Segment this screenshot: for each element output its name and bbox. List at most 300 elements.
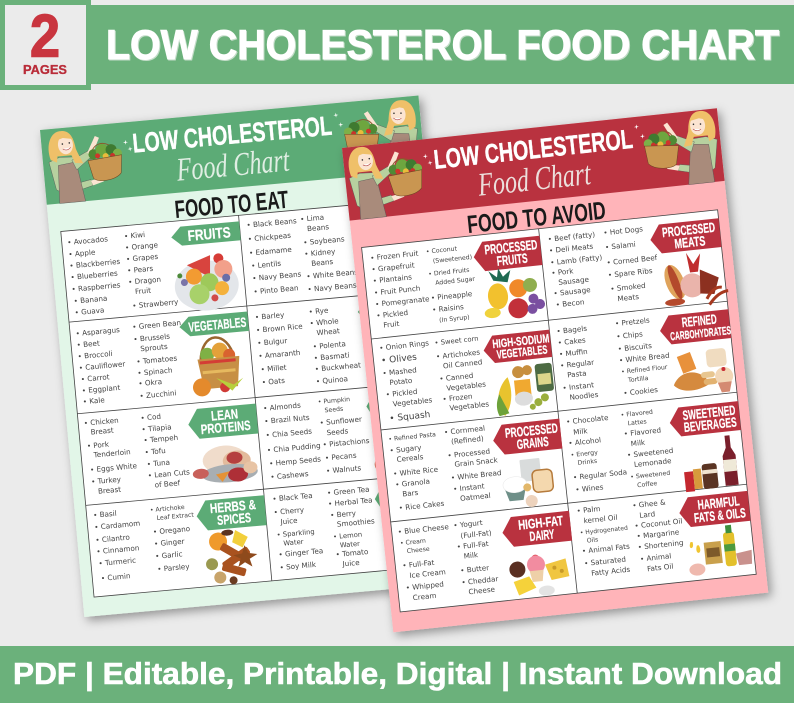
list: sweetened beverages: • Energy [570,449,599,459]
banner: lean proteins [187,404,258,440]
list: vegetables: • Tomatoes [136,354,178,366]
list: harmful fats and oils: Lard [639,509,656,520]
icon: mixed fruit [480,264,546,322]
list: processed meats: • Lamb (Fatty) [550,253,603,267]
list: sweetened beverages: • Sweetened [630,470,671,481]
icon: dairy foods [508,551,571,599]
list: high-sodium vegetables: • Canned [439,371,474,383]
list: lean proteins: • Eggs White [90,461,138,474]
banner: lean proteins: LEAN [210,406,239,424]
list: refined carbohydrates: • Pretzels [615,316,650,328]
table grid [61,198,461,597]
list: refined carbohydrates: • Instant [562,380,595,393]
list: processed fruits: • Dried Fruits [428,267,470,278]
icon: grains and bread [500,457,555,510]
list: high-fat dairy: • Full-Fat [456,539,489,551]
footer banner [0,646,794,703]
list: high-fat dairy: Cheese [407,546,430,555]
panel: nuts and seeds [263,395,373,482]
banner: processed meats [649,218,722,254]
list: legumes: Beans [307,222,330,233]
list: refined carbohydrates: • Biscuits [617,341,653,354]
panel: fruits [67,221,247,323]
list: high-sodium vegetables [379,333,490,425]
list: herbs and spices: • Artichoke [150,504,185,514]
list: harmful fats and oils: • Animal [640,551,672,564]
list: vegetables: • Kale [82,395,106,406]
list: processed meats: • Salami [604,240,636,252]
list: vegetables: • Spinach [137,366,173,378]
badge: 2 pages [0,0,91,90]
list: herbs and spices: • Turmeric [98,556,136,568]
banner: processed fruits: FRUITS [496,251,528,269]
list: processed meats: • Hot Dogs [603,224,644,237]
list: legumes: • Kidney [304,247,336,259]
list: harmful fats and oils: Oils [586,536,599,545]
sheet header: red [342,108,725,221]
list: sweetened beverages: • Chocolate [566,413,609,426]
list: legumes: Beans [311,257,334,268]
list: fruits: • Strawberry [132,297,179,310]
banner: processed grains: GRAINS [516,434,549,452]
list: lean proteins: • Tempeh [143,433,178,445]
list: fruits: • Raspberries [71,280,121,294]
list: lean proteins: • Turkey [91,475,122,486]
banner: refined carbohydrates: REFINED [681,311,718,330]
icon: meats and fish [191,443,259,486]
list: vegetables: • Broccoli [77,349,113,361]
list: high-fat dairy: • Cheddar [461,574,499,587]
list: sweetened beverages: Milk [630,438,646,448]
list: refined carbohydrates: • Cakes [557,335,586,347]
list: high-sodium vegetables: • Artichokes [436,347,481,361]
panel: processed grains [388,416,568,521]
list: processed grains: • Instant [453,481,485,494]
list: processed fruits: • Fruit Punch [373,284,421,297]
list: herbs and spices: Leaf Extract [156,512,195,522]
list: grains: • Polenta [312,339,346,351]
icon: spices [203,527,260,587]
panel: food to avoid sheet [342,108,768,632]
badge: 2 pages: PAGES [23,63,67,77]
sheet header: red: Food Chart [476,156,593,204]
list: processed grains: • White Rice [393,465,439,478]
list: legumes: • White Beans [306,267,359,281]
icon: hot dog and meats [659,249,729,309]
list: processed meats: Sausage [558,275,590,287]
list: sweetened beverages: Milk [573,426,589,437]
list: fruits [67,227,180,317]
list: beverages: • Sparkling [276,528,315,539]
list: grains: • Millet [260,363,287,374]
list: high-sodium vegetables: • Olives [381,353,418,366]
list: legumes: • Navy Beans [252,269,302,283]
list: processed fruits: • Pickled [376,308,408,320]
banner: high-fat dairy: HIGH-FAT [517,513,564,533]
list: processed fruits: Fruit [383,319,400,330]
list: beverages: Juice [279,516,298,526]
list: nuts and seeds: • Chia Pudding [267,441,321,455]
banner: sweetened beverages: SWEETENED [682,403,736,423]
list: processed grains: Cereals [396,452,424,464]
list: beverages: • Berry [330,508,357,520]
list: legumes: • Lima [300,213,324,224]
list: processed grains [388,422,504,513]
list: legumes [246,210,360,299]
list: refined carbohydrates: • Regular [560,358,595,370]
list: vegetables: • Eggplant [81,383,121,395]
list: harmful fats and oils: • Margarine [636,527,680,541]
list: grains: • Oats [261,376,286,387]
list: herbs and spices: • Parsley [157,562,191,574]
list: refined carbohydrates [556,314,673,404]
list: high-sodium vegetables: • Pickled [385,387,418,399]
list: processed fruits: • Coconut [426,245,458,256]
list: nuts and seeds: • Sunflower [319,415,362,427]
panel: harmful fats and oils [576,488,756,588]
banner: refined carbohydrates [659,309,732,345]
list: herbs and spices: • Garlic [155,549,183,561]
banner: high-fat dairy: DAIRY [529,527,555,544]
panel: vegetables [75,311,255,407]
banner: high-sodium vegetables [482,330,552,364]
list: harmful fats and oils: • Hydrogenated [580,525,628,537]
list: nuts and seeds: • Pumpkin [318,396,350,406]
list: herbs and spices: • Cardamom [94,519,141,532]
sheet header: red: LOW CHOLESTEROL [432,124,634,175]
list: processed fruits: • Frozen Fruit [370,249,419,263]
icon: canned vegetables [493,363,556,416]
list: high-sodium vegetables: • Mashed [382,365,417,378]
list: harmful fats and oils: Fats Oil [647,562,674,573]
sheet header: green: LOW CHOLESTEROL [131,111,333,159]
list: vegetables: • Asparagus [75,325,120,338]
list: refined carbohydrates: Noodles [569,390,599,402]
panel: processed fruits [370,236,548,333]
panel: grains [254,303,363,391]
list: lean proteins: Breast [98,485,122,496]
list: refined carbohydrates: • Bagels [556,324,588,336]
banner: lean proteins: PROTEINS [200,418,251,437]
list: herbs and spices [93,502,200,583]
list: harmful fats and oils: • Coconut Oil [634,516,683,530]
banner: processed fruits: PROCESSED [484,237,538,258]
list: nuts and seeds: • Almonds [263,400,301,413]
list: vegetables: • Cauliflower [78,359,126,372]
list: nuts and seeds: • Brazil Nuts [264,413,310,426]
list: high-sodium vegetables: Oil Canned [443,357,483,370]
list: sweetened beverages: • Regular Soda [573,467,627,482]
list: nuts and seeds: Seeds [326,426,349,437]
list: processed fruits: • Plantains [372,272,413,285]
list: fruits: • Apple [68,247,96,259]
list: nuts and seeds: • Pistachions [322,436,370,449]
list: lean proteins: • Pork [86,439,110,451]
list: harmful fats and oils: • Shortening [637,538,684,552]
list: fruits: • Avocados [67,234,109,247]
banner: vegetables: VEGETABLES [188,315,247,335]
list: lean proteins: • Tilapia [141,422,172,434]
banner: fruits: FRUITS [187,224,231,245]
list: legumes: • Edamame [249,245,293,258]
list: processed fruits: • Pineapple [430,289,473,302]
list: beverages: Juice [341,558,361,568]
panel: herbs and spices [93,495,272,596]
panel: beverages [272,484,379,574]
panel: legumes [246,210,360,299]
list: nuts and seeds: • Pecans [324,451,357,463]
list: nuts and seeds: • Walnuts [326,463,362,475]
list: fruits: • Kiwi [124,230,145,241]
list: processed grains: • White Bread [450,468,502,482]
list: grains: • Quinoa [316,374,348,386]
list: beverages: • Soy Milk [279,560,317,572]
list: harmful fats and oils: • Animal Fats [581,542,630,556]
panel: sweetened beverages [566,399,747,504]
list: vegetables: • Brussels [133,332,170,344]
list: high-sodium vegetables: Potato [389,376,413,387]
banner: processed meats: MEATS [674,233,706,251]
list: sweetened beverages: • Flavored [623,425,661,438]
list: beverages [272,484,379,574]
list: refined carbohydrates: • Refined Flour [621,364,668,376]
list: high-sodium vegetables: • Onion Rings [379,338,430,353]
list: refined carbohydrates: • Muffin [558,347,588,359]
title banner [91,5,794,84]
list: processed fruits [370,243,480,331]
list: lean proteins: Tenderloin [92,447,131,460]
list: legumes: • Navy Beans [307,280,357,294]
list: herbs and spices: • Cinnamon [96,543,140,556]
list: high-fat dairy: Milk [463,550,479,561]
list: harmful fats and oils: Fatty Acids [591,565,631,578]
list: herbs and spices: • Basil [93,509,117,520]
list: legumes: • Black Beans [246,216,297,230]
list: beverages: Water [283,538,304,548]
list: nuts and seeds: Seeds [324,406,344,414]
badge: 2 pages: 2 [30,2,60,70]
list: grains: • Brown Rice [256,321,304,335]
icon: vegetable basket [189,335,245,397]
list: processed grains: (Refined) [451,434,484,446]
heading: food to avoid: FOOD TO AVOID [466,197,607,239]
list: harmful fats and oils: • Ghee & [632,498,666,510]
list: lean proteins: • Cod [140,412,161,423]
banner: herbs and spices [195,495,267,531]
list: legumes: • Chickpeas [247,231,292,244]
list: processed meats: • Becon [555,297,585,309]
banner: sweetened beverages: BEVERAGES [683,414,737,435]
list: nuts and seeds: • Chia Seeds [265,427,313,440]
list: processed meats: • Corned Beef [606,253,658,267]
banner: harmful fats and oils: FATS & OILS [693,505,746,526]
list: legumes: • Soybeans [303,234,345,247]
list: high-fat dairy: Ice Cream [409,567,446,580]
list: processed meats: • Beef (fatty) [547,230,596,244]
list: vegetables: • Green Bean [132,318,181,331]
list: processed meats: • Pork [551,266,575,278]
list: processed grains: • Rice Cakes [398,499,445,512]
list: beverages: Water [340,540,360,550]
list: beverages: Smoothies [337,516,375,529]
list: grains: • Rye [308,306,329,316]
list: beverages: • Cherry [273,505,305,517]
list: processed grains: Grain Snack [454,455,499,469]
list: harmful fats and oils: • Palm [576,504,601,515]
list: high-sodium vegetables: • Sweet corn [434,335,479,347]
list: processed meats: Meats [617,292,640,303]
list: grains: Wheat [316,326,340,337]
list: lean proteins: Breast [90,426,114,437]
table grid [362,210,756,612]
list: herbs and spices: • Cumin [100,571,131,583]
list: sweetened beverages: • Alcohol [568,435,601,448]
list: harmful fats and oils: kernel Oil [583,513,618,525]
list: high-sodium vegetables: Vegetables [446,380,487,393]
footer banner: PDF | Editable, Printable, Digital | Instant Download [13,656,782,691]
heading: food to eat: FOOD TO EAT [174,186,290,224]
list: grains: • Buckwheat [314,360,361,374]
banner: harmful fats and oils [678,491,751,528]
list: refined carbohydrates: • White Bread [618,351,670,365]
list: fruits: • Guava [74,305,105,317]
banner: processed grains: PROCESSED [504,420,559,441]
list: sweetened beverages: Lemonade [634,456,672,469]
banner: high-sodium vegetables: HIGH-SODIUM [492,331,550,351]
list: grains [254,303,363,391]
list: vegetables: • Zucchini [139,388,177,401]
list: high-fat dairy: Cheese [468,585,496,596]
list: processed fruits: Added Sugar [435,276,476,287]
banner: sweetened beverages [668,401,741,437]
icon: oils and fats [685,523,754,576]
panel: high-sodium vegetables [379,326,558,428]
list: high-fat dairy: (Full-Fat) [460,528,492,540]
list: sweetened beverages: • Wines [575,482,604,494]
banner: processed grains [492,419,562,456]
list: beverages: • Ginger Tea [278,546,324,559]
list: high-fat dairy: • Cream [400,538,426,547]
banner: refined carbohydrates: CARBOHYDRATES [670,325,732,343]
list: high-sodium vegetables: Vegetables [392,395,433,408]
list: processed grains: • Refined Pasta [388,431,436,443]
list: lean proteins: • Tofu [144,446,166,457]
list: processed meats: • Deli Meats [549,242,594,255]
list: processed meats: • Smoked [610,281,646,293]
list: herbs and spices: • Oregano [152,524,190,536]
list: refined carbohydrates: • Chips [616,329,643,341]
list: processed grains: • Processed [447,447,491,460]
banner: herbs and spices: HERBS & [209,497,257,516]
panel: lean proteins [83,403,263,496]
banner: processed fruits [472,236,542,272]
list: high-sodium vegetables: • Frozen [442,392,473,404]
list: processed fruits: (Sweetened) [433,254,472,265]
list: legumes: • Lentils [251,259,282,270]
list: beverages: • Lemon [333,530,362,541]
list: grains: • Basmati [313,350,350,363]
list: fruits: • Orange [125,240,159,252]
panel: processed meats [547,216,729,321]
list: refined carbohydrates: Pasta [567,369,587,380]
list: processed fruits: • Raisins [432,302,464,314]
list: grains: • Whole [309,316,340,328]
list: grains: • Barley [254,310,285,322]
list: vegetables: • Carrot [80,372,110,384]
banner: harmful fats and oils: HARMFUL [697,493,740,513]
list: fruits: • Banana [73,294,108,306]
banner: high-sodium vegetables: VEGETABLES [496,342,548,362]
list: fruits: • Blackberries [69,257,121,270]
list: sweetened beverages: Drinks [577,458,598,467]
banner: high-fat dairy [501,511,572,548]
list: grains: • Bulgur [257,336,288,348]
list: harmful fats and oils [576,496,687,580]
list: vegetables: • Okra [138,377,162,388]
list: high-fat dairy: • Blue Cheese [397,522,450,536]
list: fruits: • Dragon [128,275,161,287]
list: processed grains: Bars [402,488,419,499]
banner: vegetables [179,311,249,337]
list: sweetened beverages: Coffee [637,480,658,489]
list: processed meats: • Spare Ribs [607,266,653,280]
list: nuts and seeds: • Hemp Seeds [269,454,322,468]
list: lean proteins: • Lean Cuts [147,467,190,480]
list: high-sodium vegetables: Vegetables [449,399,490,412]
list: beverages: • Green Tea [327,485,370,497]
list: refined carbohydrates: Tortilla [627,375,649,384]
list: high-fat dairy: Cream [412,591,437,602]
list: grains: • Amaranth [258,348,301,361]
list: nuts and seeds [263,395,373,482]
list: beverages: • Tomato [335,547,369,559]
list: sweetened beverages: • Sweetened [626,446,674,460]
icon: beverages [681,435,739,492]
list: fruits: Fruit [135,286,151,296]
sheet header: green: Food Chart [174,143,292,189]
list: processed fruits: • Grapefruit [371,261,415,274]
list: vegetables [75,318,188,406]
list: processed fruits: • Pomegranate [375,294,430,309]
icon: baked goods [670,347,735,397]
list: lean proteins: • Tuna [146,458,170,469]
list: fruits: • Blueberries [70,269,118,282]
icon: fruit bowl [172,252,241,313]
list: high-fat dairy: • Whipped [405,579,444,592]
panel: food to eat sheet [40,96,463,617]
list: refined carbohydrates: • Cookies [623,385,659,398]
list: beverages: • Herbal Tea [328,495,373,508]
list: high-sodium vegetables: • Squash [389,410,431,424]
list: lean proteins [83,410,191,496]
list: high-fat dairy: • Butter [460,563,490,575]
list: herbs and spices: • Cilantro [95,533,130,545]
list: processed meats: • Sausage [553,285,592,298]
list: sweetened beverages: Lattes [627,418,647,427]
list: vegetables: • Beet [76,338,100,350]
list: sweetened beverages [566,407,677,496]
list: high-fat dairy: • Full-Fat [402,558,435,570]
sheet header: green [40,96,425,205]
panel: refined carbohydrates [556,307,737,409]
list: harmful fats and oils: • Saturated [584,555,626,568]
list: fruits: • Grapes [126,252,159,264]
list: fruits: • Pears [127,264,154,275]
list: high-fat dairy [397,517,500,603]
panel: high-fat dairy [397,509,578,611]
list: legumes: • Pinto Bean [253,283,299,296]
list: processed grains: • Cornmeal [444,424,485,437]
